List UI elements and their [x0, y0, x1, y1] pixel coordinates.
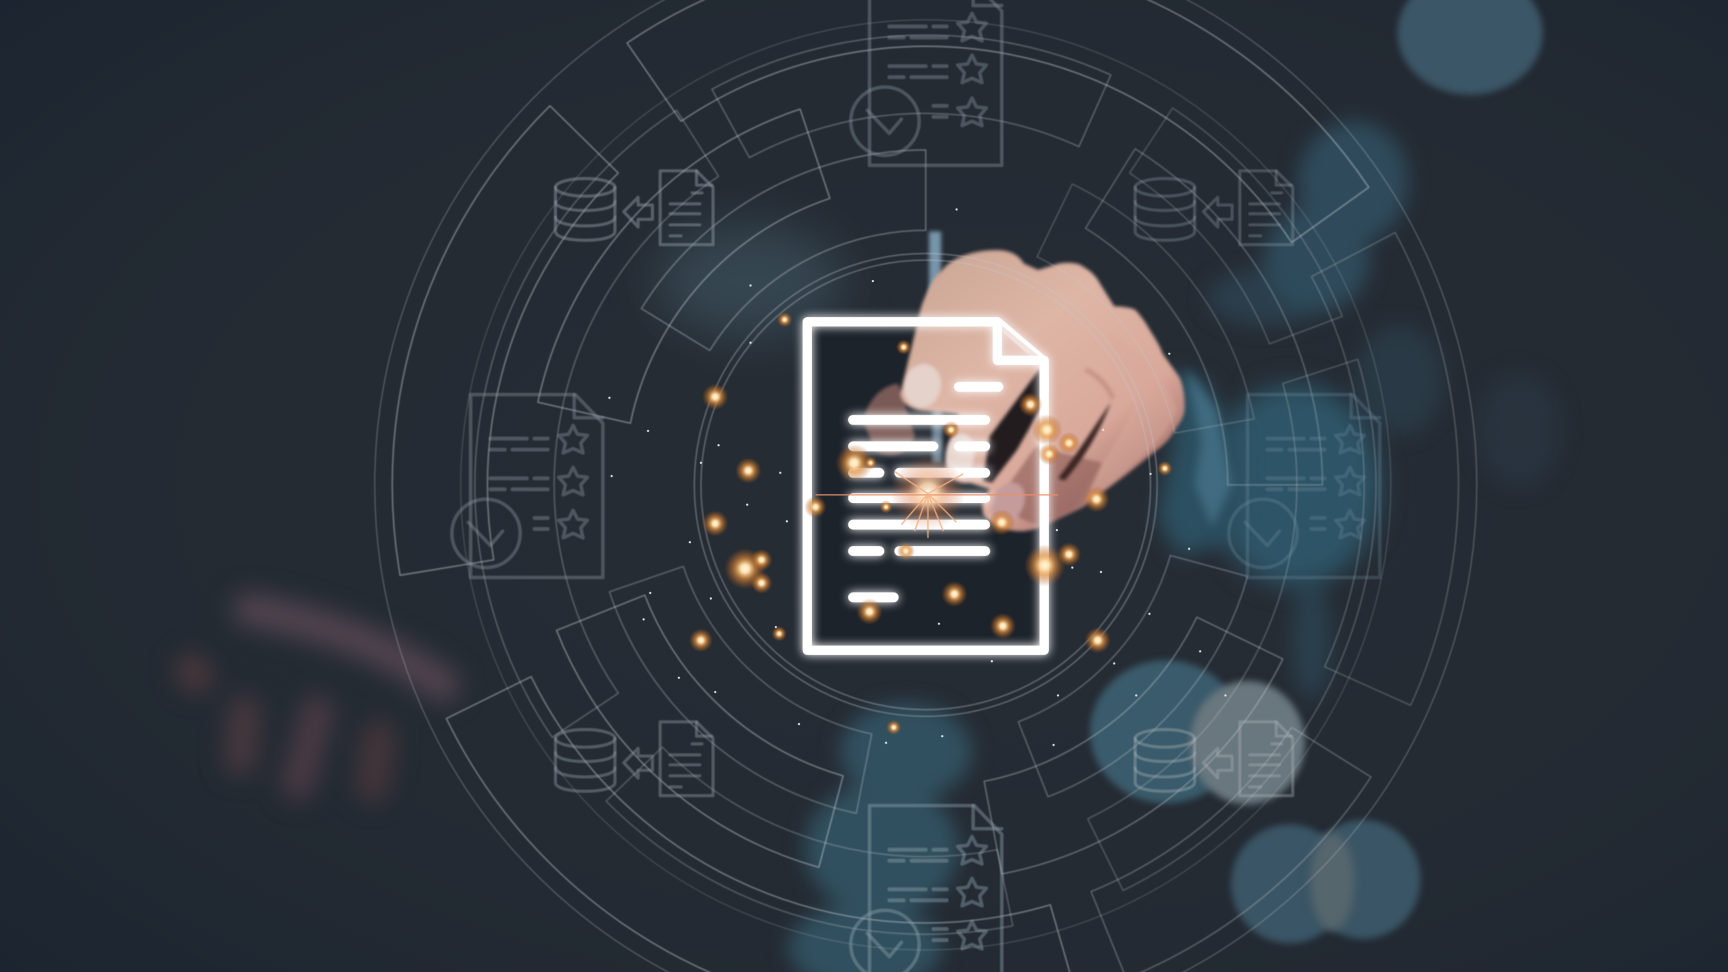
segment: lower right inner: [1018, 555, 1248, 797]
icon: rated document bottom: [851, 806, 1002, 972]
document icon: [807, 322, 1044, 650]
lower hand shadow: [1008, 446, 1102, 527]
bokeh: top right: [1397, 0, 1543, 95]
segment: bottom outer: [446, 677, 1077, 972]
segment: top mid: [712, 35, 1111, 158]
icon: database and document bottom right: [1135, 722, 1293, 796]
pen lower part: [932, 408, 942, 463]
HUD ring segments: [392, 0, 1458, 972]
segment: lower left mid: [557, 595, 843, 867]
hand: [863, 250, 1185, 531]
nail: index finger: [900, 360, 945, 411]
bokeh: lower right pair: [1090, 660, 1242, 803]
central flare: [816, 455, 1058, 538]
folded corner: [997, 322, 1044, 360]
segment: bottom band: [606, 747, 1013, 934]
haze: lower left of sleeve: [1292, 579, 1331, 700]
segment: upper right inner: [1037, 184, 1254, 433]
bokeh lights: [656, 0, 1560, 972]
hand shape: [900, 250, 1185, 531]
text lines: [853, 387, 998, 597]
segment: upper left mid: [538, 109, 830, 423]
thumb behind: [863, 384, 915, 455]
bokeh: bottom right pair: [1231, 824, 1348, 943]
bokeh: upper right cluster: [1207, 121, 1560, 487]
segment: right outer: [1311, 233, 1458, 705]
sleeve: [1157, 368, 1381, 586]
nail: middle finger: [942, 431, 977, 481]
segment: right band: [1088, 359, 1376, 890]
tiny star particles: [608, 208, 1227, 746]
segment: left band: [475, 110, 719, 737]
gap between index and middle fingers: [983, 368, 1041, 483]
icon: rated document right: [1229, 395, 1380, 577]
document outline: [807, 322, 1044, 650]
segment: upper left inner: [641, 150, 926, 350]
icon: database and document top right: [1135, 171, 1293, 245]
knuckle crease: [1086, 369, 1113, 399]
segment: lower left inner: [609, 566, 872, 813]
bokeh: bottom centre column: [788, 703, 972, 972]
haze: upper left of document: [656, 226, 843, 336]
segment: lower right mid: [984, 617, 1283, 874]
segment: upper right mid: [1086, 149, 1322, 485]
icon: database and document bottom left: [555, 722, 713, 796]
segment: bottom right outer: [1091, 727, 1371, 972]
icon: rated document left: [452, 395, 603, 577]
HUD rings: [375, 0, 1477, 972]
icon: rated document top: [851, 0, 1002, 165]
nail: ring finger: [986, 477, 1031, 528]
gap between ring and little fingers: [1058, 402, 1111, 480]
golden sparks: [689, 312, 1173, 735]
segment: left outer: [392, 106, 618, 575]
icon: database and document top left: [555, 171, 713, 245]
dark backdrop behind document: [811, 326, 1040, 646]
finger shading: [1074, 331, 1177, 509]
pen: [929, 231, 941, 309]
segment: top outer: [627, 0, 1369, 242]
segment: upper right band: [1130, 108, 1342, 344]
blurred reflection: left hand glow: [192, 609, 443, 787]
